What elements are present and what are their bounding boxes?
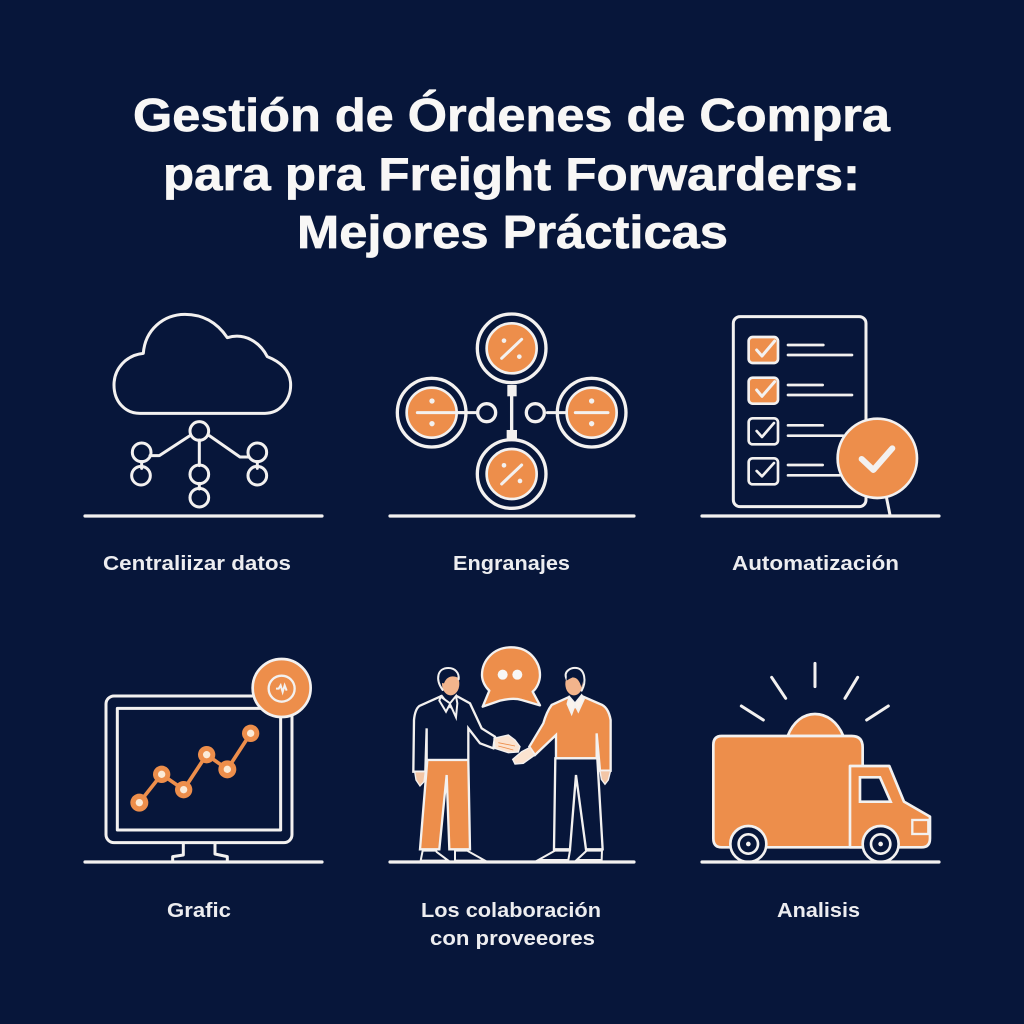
icon: monitor with line chart (106, 659, 311, 862)
label: centralizar datos: Centraliizar datos (103, 553, 291, 575)
person left (413, 668, 520, 861)
title (133, 89, 890, 258)
label: engranajes: Engranajes (453, 553, 570, 575)
baseline: truck (702, 860, 939, 864)
person right (513, 668, 611, 860)
speech bubble (482, 647, 540, 707)
title: para pra Freight Forwarders: (163, 148, 860, 200)
label: automatización: Automatización (732, 553, 899, 575)
title: Mejores Prácticas (297, 206, 728, 258)
icon: automation checklist (733, 317, 917, 515)
baseline: checklist (702, 514, 939, 518)
label: colaboración con proveedores: con proveeores (430, 928, 595, 950)
line chart (130, 725, 259, 812)
baseline: cloud (85, 514, 322, 518)
icon: delivery truck with alert rays (713, 663, 930, 862)
label: colaboración con proveedores (421, 900, 601, 950)
icon: connected gears (397, 314, 626, 508)
label: analisis: Analisis (777, 900, 860, 922)
baseline: gears (390, 514, 634, 518)
baseline: people (390, 860, 634, 864)
label: grafic: Grafic (167, 900, 231, 922)
label: colaboración con proveedores: Los colaboración (421, 900, 601, 922)
title: Gestión de Órdenes de Compra (133, 89, 890, 141)
rays (741, 663, 888, 720)
badge: pulse (253, 659, 311, 717)
icon: two people shaking hands with speech bubble (413, 647, 611, 861)
icon: cloud with data network (114, 314, 291, 507)
wheels (730, 826, 899, 862)
baseline: monitor (85, 860, 322, 864)
